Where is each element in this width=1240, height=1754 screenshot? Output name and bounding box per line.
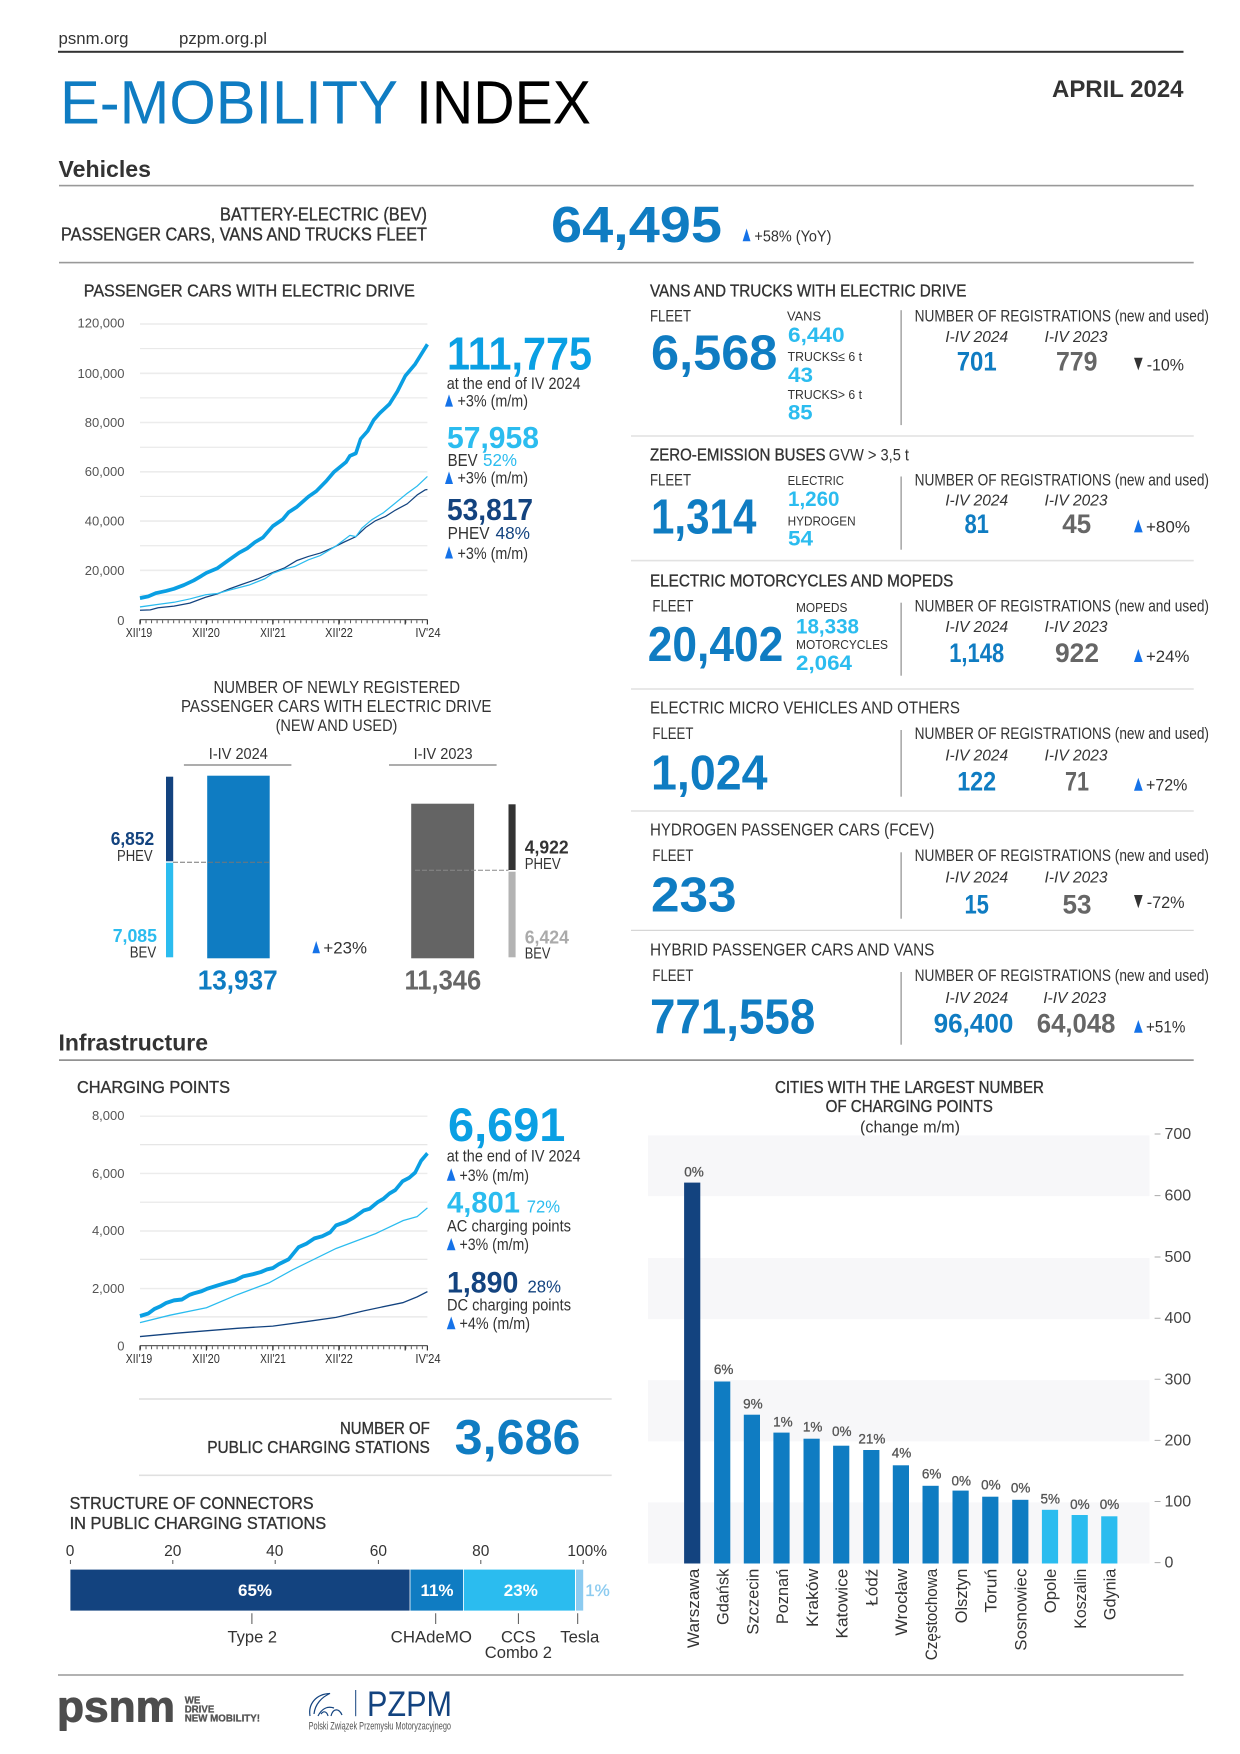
title [60,69,591,137]
callout: AC charging points: +3% (m/m) [460,1236,529,1254]
stacked bar: 23% [504,1581,538,1600]
panel: vans and trucks: 85 [788,402,813,425]
registrations: vans and trucks: I-IV 2023 [1045,329,1108,346]
line chart: charging points: 2,000 [92,1281,124,1296]
panel: public charging stations [139,1398,612,1476]
line chart: passenger cars fleet: XII'20 [192,626,220,640]
registrations: motorcycles: I-IV 2024 [945,619,1009,636]
line chart: passenger cars fleet: 120,000 [78,316,124,330]
panel: structure of connectors: IN PUBLIC CHARGING STATIONS [70,1513,326,1533]
callout: DC charging points [447,1266,571,1333]
bar value labels: 6% [922,1466,941,1481]
line chart: passenger cars fleet: XII'22 [325,626,353,640]
panel: newly registered passenger cars: (NEW AND USED) [276,717,397,735]
registrations: hybrid cars: I-IV 2023 [1043,990,1107,1007]
callout: BEV: 57,958 [447,421,539,455]
bar value labels: 0% [832,1424,852,1439]
bar value labels [684,1164,1119,1512]
title: INDEX [416,69,591,137]
bar: I-IV 2023: PHEV [525,856,561,873]
panel: structure of connectors: STRUCTURE OF CONNECTORS [70,1493,314,1513]
registrations: motorcycles: +24% [1146,648,1190,666]
connector labels [228,1613,600,1662]
panel: zero-emission buses: 1,314 [651,491,756,545]
registrations: micro vehicles: I-IV 2023 [1045,748,1108,765]
title: E-MOBILITY [60,69,398,137]
axis: 20 [164,1543,182,1560]
bar value labels: 1% [773,1414,793,1430]
callout: PHEV: 48% [496,523,530,543]
panel: hydrogen cars: HYDROGEN PASSENGER CARS (FCEV) [650,820,934,840]
panel: cities bar chart: (change m/m) [860,1118,960,1136]
panel: vans and trucks: VANS [787,309,821,324]
registrations: hydrogen cars: I-IV 2024 [945,870,1009,887]
bar: I-IV 2024: I-IV 2024 [209,746,268,763]
line chart: charging points: XII'21 [260,1352,286,1366]
city labels [684,1568,1120,1660]
bar: I-IV 2024: 13,937 [198,964,278,995]
panel: BEV fleet total [59,196,1194,263]
city labels: Częstochowa [922,1568,941,1660]
panel: vans and trucks: TRUCKS> 6 t [788,387,862,402]
callout: total charging points: +3% (m/m) [460,1167,529,1185]
axis: 0 [66,1543,75,1560]
line chart: passenger cars fleet: 80,000 [85,415,124,430]
callout: total charging points [447,1099,580,1185]
line chart: charging points: XII'20 [192,1352,220,1366]
line chart: charging points: IV'24 [415,1352,441,1366]
line chart: passenger cars fleet: XII'21 [260,626,286,640]
panel: BEV fleet total: PASSENGER CARS, VANS AND TRUCKS FLEET [61,225,427,245]
panel: hybrid cars and vans: 771,558 [650,990,815,1044]
city labels: Gdynia [1100,1568,1120,1620]
panel: motorcycles and mopeds: MOPEDS [796,600,848,615]
bar: I-IV 2023 [389,746,569,995]
panel: structure of connectors [66,1493,610,1662]
bar value labels: 9% [743,1397,763,1412]
panel: cities bar chart: OF CHARGING POINTS [826,1096,993,1116]
registrations: micro vehicles: 122 [957,767,996,797]
logo: PSNM: WE [185,1695,201,1706]
bar: I-IV 2024: 6,852 [111,829,154,849]
callout: BEV: 52% [483,450,517,470]
axis: 40 [266,1543,284,1560]
bar: I-IV 2024: BEV [130,944,156,961]
connector labels: Tesla [560,1628,600,1646]
panel: public charging stations: 3,686 [455,1411,580,1465]
chart bands and axis: 600 [1164,1188,1191,1204]
chart bands and axis: 200 [1164,1432,1191,1449]
axis: 60 [370,1543,387,1560]
bar value labels: 0% [1070,1497,1090,1512]
city labels: Katowice [833,1569,852,1638]
panel: zero-emission buses: HYDROGEN [788,513,856,528]
logo: PZPM: PZPM [367,1685,452,1724]
header links: pzpm.org.pl [179,29,267,48]
registrations: vans and trucks: I-IV 2024 [945,329,1009,346]
callout: total charging points: 6,691 [448,1099,565,1152]
line chart: passenger cars fleet: XII'19 [126,626,152,640]
panel: hybrid cars and vans [650,940,1209,1045]
connector labels: Type 2 [228,1628,277,1646]
callout: AC charging points: 4,801 [447,1187,520,1220]
panel: zero-emission buses: 1,260 [788,488,840,511]
logo: PZPM: Polski Związek Przemysłu Motoryzacyjnego [309,1721,451,1733]
callout: total fleet: +3% (m/m) [458,393,528,411]
panel: zero-emission buses: ZERO-EMISSION BUSES [650,444,826,464]
line chart: charging points: 0 [117,1338,124,1354]
registrations: buses: 45 [1062,509,1091,539]
registrations: hydrogen cars: I-IV 2023 [1045,870,1108,887]
heading: Infrastructure: Infrastructure [58,1030,208,1056]
registrations: micro vehicles: I-IV 2024 [945,748,1009,765]
panel: motorcycles and mopeds: FLEET [652,598,693,616]
panel: motorcycles and mopeds [648,570,1209,676]
panel: micro vehicles [650,697,1209,800]
connector labels: Combo 2 [485,1644,552,1662]
line chart: passenger cars fleet: 20,000 [85,563,124,578]
line chart: passenger cars fleet: 0 [117,613,124,628]
panel: vans and trucks: 6,440 [788,324,845,347]
registrations: micro vehicles: 71 [1065,767,1089,797]
registrations: hydrogen cars: 15 [964,889,989,919]
city labels: Poznań [773,1569,792,1624]
panel: zero-emission buses: ELECTRIC [788,473,844,488]
stacked bar [70,1570,610,1611]
registrations: motorcycles: 1,148 [949,638,1004,668]
registrations: motorcycles: 922 [1055,638,1099,668]
panel: zero-emission buses: FLEET [650,472,691,490]
callout: AC charging points [447,1187,571,1254]
city labels: Koszalin [1071,1569,1090,1629]
panel: motorcycles and mopeds: 2,064 [796,652,852,675]
panel: cities bar chart [648,1077,1191,1660]
registrations: hybrid cars: 96,400 [934,1009,1013,1039]
registrations: vans and trucks: 701 [957,346,997,376]
registrations: buses: 81 [964,509,989,539]
panel: micro vehicles: ELECTRIC MICRO VEHICLES AND OTHERS [650,697,960,717]
registrations: hydrogen cars: 53 [1062,889,1092,919]
callout: total fleet: 111,775 [447,328,592,380]
bars [684,1183,1117,1564]
callout: total fleet [445,328,592,411]
chart bands and axis: 500 [1164,1249,1191,1266]
registrations: buses [915,472,1209,539]
connector labels: CHAdeMO [391,1628,472,1646]
chart bands and axis: 400 [1164,1310,1191,1327]
logo: PSNM [57,1682,260,1731]
chart bands and axis: 700 [1164,1126,1191,1143]
city labels: Szczecin [744,1569,762,1635]
registrations: hydrogen cars: -72% [1147,894,1185,912]
registrations: hybrid cars: 64,048 [1037,1009,1116,1039]
stacked bar: 65% [238,1581,272,1600]
panel: vans and trucks: 6,568 [651,326,777,380]
city labels: Sosnowiec [1011,1568,1030,1651]
line chart: charging points: XII'19 [126,1352,152,1366]
bar value labels: 0% [684,1164,704,1180]
callout: DC charging points: +4% (m/m) [460,1315,530,1333]
panel: vans and trucks: VANS AND TRUCKS WITH ELECTRIC DRIVE [650,280,966,300]
panel: vans and trucks [650,280,1209,425]
line chart: passenger cars fleet: IV'24 [415,626,441,640]
panel: zero-emission buses [650,444,1209,550]
panel: vans and trucks: 43 [788,364,813,387]
panel: hybrid cars and vans: FLEET [652,967,693,985]
registrations: motorcycles [915,598,1209,668]
panel: hybrid cars and vans: HYBRID PASSENGER CARS AND VANS [650,940,934,960]
bar value labels: 0% [1011,1480,1030,1495]
bar value labels: 6% [714,1362,733,1377]
callout: total fleet: at the end of IV 2024 [447,375,580,393]
axis [66,1543,607,1564]
panel: motorcycles and mopeds: MOTORCYCLES [796,637,888,652]
line chart: passenger cars fleet: 60,000 [85,464,124,479]
callout: PHEV [445,493,533,563]
logo: PZPM [309,1685,452,1733]
bar: I-IV 2023: 6,424 [525,927,569,947]
registrations: hydrogen cars [915,847,1209,919]
bar: I-IV 2024: PHEV [117,848,153,865]
registrations: micro vehicles [915,725,1209,797]
city labels: Gdańsk [714,1568,733,1625]
bar value labels: 0% [981,1477,1001,1492]
bar: I-IV 2024: 7,085 [113,926,157,946]
panel: newly registered passenger cars: PASSENGER CARS WITH ELECTRIC DRIVE [181,696,492,716]
bar: I-IV 2023: I-IV 2023 [414,746,473,763]
city labels: Opole [1041,1569,1060,1613]
line chart: passenger cars fleet: 40,000 [85,514,124,528]
callout: BEV: BEV [448,450,478,470]
callout: PHEV: PHEV [448,523,490,543]
chart bands and axis [648,1126,1191,1572]
bar value labels: 1% [803,1420,822,1435]
line chart: charging points: 8,000 [92,1108,124,1123]
panel: newly registered passenger cars [111,677,569,995]
panel: passenger cars line chart [78,280,592,640]
panel: hydrogen cars [650,820,1209,923]
panel: hydrogen cars: 233 [651,869,737,923]
panel: charging points line chart [77,1077,580,1366]
city labels: Kraków [803,1568,822,1627]
bar: I-IV 2024 [111,746,291,995]
panel: motorcycles and mopeds: 18,338 [796,616,859,638]
panel: cities bar chart: CITIES WITH THE LARGEST NUMBER [775,1077,1044,1097]
logo: PSNM: DRIVE [185,1704,215,1715]
panel: vans and trucks: FLEET [650,308,691,326]
bar: I-IV 2023: 4,922 [525,837,569,857]
panel: micro vehicles: FLEET [652,725,693,743]
bar: I-IV 2023: 11,346 [404,964,481,995]
line chart: passenger cars fleet: 100,000 [78,366,124,381]
panel: vans and trucks: TRUCKS≤ 6 t [788,349,862,364]
line chart: charging points: 4,000 [92,1223,124,1238]
registrations: hybrid cars: +51% [1146,1019,1186,1037]
callout: DC charging points: 28% [528,1276,561,1296]
registrations: hybrid cars: I-IV 2024 [945,990,1009,1007]
bar: I-IV 2023: BEV [525,945,551,962]
callout: BEV: +3% (m/m) [458,470,528,488]
panel: newly registered passenger cars: NUMBER OF NEWLY REGISTERED [214,677,460,697]
line chart: charging points [92,1108,441,1366]
panel: zero-emission buses: 54 [788,528,813,550]
bar value labels: 0% [951,1473,971,1488]
header links [58,29,1184,53]
panel: BEV fleet total: BATTERY-ELECTRIC (BEV) [220,204,427,224]
callout: AC charging points: 72% [527,1197,560,1217]
bar value labels: 21% [858,1432,885,1446]
city labels: Łódź [862,1569,882,1606]
callout: PHEV: +3% (m/m) [458,545,528,563]
line chart: charging points: 6,000 [92,1166,124,1181]
panel: public charging stations: PUBLIC CHARGING STATIONS [207,1437,430,1457]
header links: psnm.org [58,29,128,48]
registrations: buses: I-IV 2023 [1045,492,1108,510]
change indicator: +23% [323,939,367,958]
panel: public charging stations: NUMBER OF [340,1418,430,1438]
registrations: motorcycles: I-IV 2023 [1045,619,1108,636]
city labels: Olsztyn [952,1569,971,1623]
panel: charging points line chart: CHARGING POINTS [77,1077,230,1097]
registrations: vans and trucks: 779 [1056,346,1097,376]
axis: 100% [567,1543,607,1560]
bar value labels: 0% [1100,1497,1119,1512]
callout: DC charging points: DC charging points [447,1296,571,1314]
registrations: buses: +80% [1146,518,1190,536]
line chart: passenger cars fleet [78,316,441,640]
registrations: micro vehicles: +72% [1146,777,1188,795]
connector labels: CCS [501,1628,536,1646]
stacked bar: 11% [420,1581,454,1600]
city labels: Wrocław [892,1568,911,1636]
city labels: Toruń [982,1569,1000,1613]
panel: motorcycles and mopeds: ELECTRIC MOTORCYCLES AND MOPEDS [650,570,953,590]
panel: hydrogen cars: FLEET [652,847,693,865]
registrations: vans and trucks [915,308,1209,376]
panel: zero-emission buses: GVW > 3,5 t [829,446,909,464]
registrations: buses: I-IV 2024 [945,492,1009,510]
chart bands and axis: 300 [1164,1371,1191,1388]
bar value labels: 5% [1040,1492,1060,1507]
line chart: charging points: XII'22 [325,1352,353,1366]
stacked bar: 1% [585,1581,610,1600]
heading: Vehicles: Vehicles [58,156,151,182]
panel: BEV fleet total: +58% (YoY) [754,229,831,246]
logo: PSNM: NEW MOBILITY! [185,1713,260,1724]
callout: AC charging points: AC charging points [447,1217,571,1235]
chart bands and axis: 100 [1164,1494,1191,1510]
callout: total charging points: at the end of IV 2024 [447,1148,580,1166]
axis: 80 [472,1543,490,1560]
icon: car outline [310,1694,342,1716]
registrations: vans and trucks: -10% [1147,356,1184,374]
callout: DC charging points: 1,890 [447,1266,518,1300]
panel: BEV fleet total: 64,495 [551,196,722,253]
panel: passenger cars line chart: PASSENGER CARS WITH ELECTRIC DRIVE [84,280,415,300]
bar value labels: 4% [892,1445,911,1460]
chart bands and axis: 0 [1164,1555,1174,1572]
panel: micro vehicles: 1,024 [651,746,768,800]
date: APRIL 2024 [1052,76,1184,103]
registrations: hybrid cars [915,967,1209,1039]
city labels: Warszawa [684,1568,703,1648]
callout: BEV [445,421,539,488]
panel: motorcycles and mopeds: 20,402 [648,618,783,672]
callout: PHEV: 53,817 [447,493,533,527]
logo: PSNM: psnm [57,1682,175,1731]
